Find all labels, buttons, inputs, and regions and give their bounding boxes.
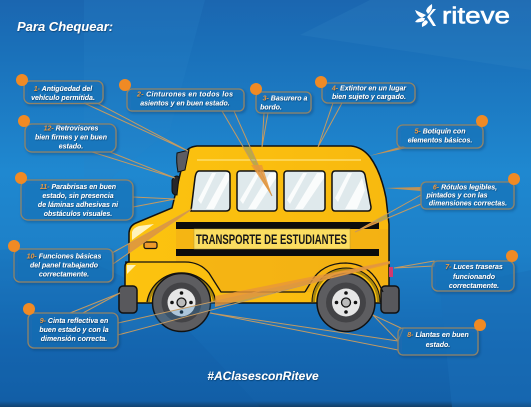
mirror top [177,150,189,172]
window 3 [284,171,325,211]
callout 9: dimensión correcta. [41,336,107,343]
callout 1: vehículo permitida. [31,95,95,102]
callout 1: 1- Antigüedad del [34,86,93,93]
callout 7: correctamente. [449,283,499,290]
callout 2: asientos y en buen estado. [140,100,230,108]
window 1 [191,171,230,211]
callout 8 [210,313,486,355]
callout 6: pintados y con las [425,192,488,200]
callout 12: bien firmes y en buen [35,134,107,142]
callout 3: 3- Basurero a [263,96,307,102]
logo: riteve: riteve [442,2,510,28]
black stripes [176,222,379,229]
icon: riteve star [415,4,436,27]
callout 6 [355,173,520,232]
bus body [125,146,389,303]
callout 11: 11- Parabrisas en buen [40,184,116,191]
tail light [389,267,393,277]
logo: riteve [415,2,510,28]
callout 10: 10- Funciones básicas [27,254,101,260]
callout 6: 6- Rótulos legibles, [433,184,497,192]
callout 5: elementos básicos. [408,138,472,144]
wheel arch lines [125,262,305,292]
hood highlight [132,224,154,240]
callout 11: de láminas adhesivas ni [38,202,119,209]
callout 5 [369,115,488,156]
sign: TRANSPORTE DE ESTUDIANTES [196,232,347,247]
callout 8: 8- Llantas en buen [407,332,469,339]
callout 7 [394,250,518,291]
callout 4 [315,76,415,147]
callout 3 [250,83,311,147]
callout 2 [119,79,272,196]
shaded side [176,229,388,292]
window 4 [332,171,371,211]
callout 12: 12- Retrovisores [44,126,99,132]
front wheel [147,273,216,332]
hashtag: #AClasesconRiteve [207,369,319,383]
callout 4: bien sujeto y cargado. [332,94,406,101]
rear wheel [305,263,383,332]
mirror lower [172,176,179,195]
title: Para Chequear: [17,19,113,34]
callout 9 [23,261,390,348]
callout 5: 5- Botiquín con [415,128,465,136]
callout 11: obstáculos visuales. [44,211,112,218]
callout 8: estado. [426,342,450,349]
front bumper [119,286,137,313]
callout 10: correctamente. [39,272,89,278]
callout 11: estado, sin presencia [42,193,114,200]
callout 10 [8,209,192,282]
callout 10: del panel trabajando [30,262,99,270]
callout 2: 2- Cinturones en todos los [136,92,233,98]
callout 9: buen estado y con la [39,327,109,334]
callout 6: dimensiones correctas. [429,200,507,208]
callout 7: 7- Luces traseras [445,264,503,271]
callout 7: funcionando [453,274,496,281]
headlight [144,242,157,248]
sign [194,229,350,249]
callout 12: estado. [59,144,83,150]
bus [119,146,399,332]
callout 4: 4- Extintor en un lugar [331,86,407,92]
callout 11 [15,172,175,220]
callout 9: 9- Cinta reflectiva en [40,318,108,325]
window 2 [237,171,277,211]
callout 12 [18,115,175,178]
callout 3: bordo. [260,104,282,112]
rear bumper [381,286,399,313]
callout 1 [16,74,188,151]
